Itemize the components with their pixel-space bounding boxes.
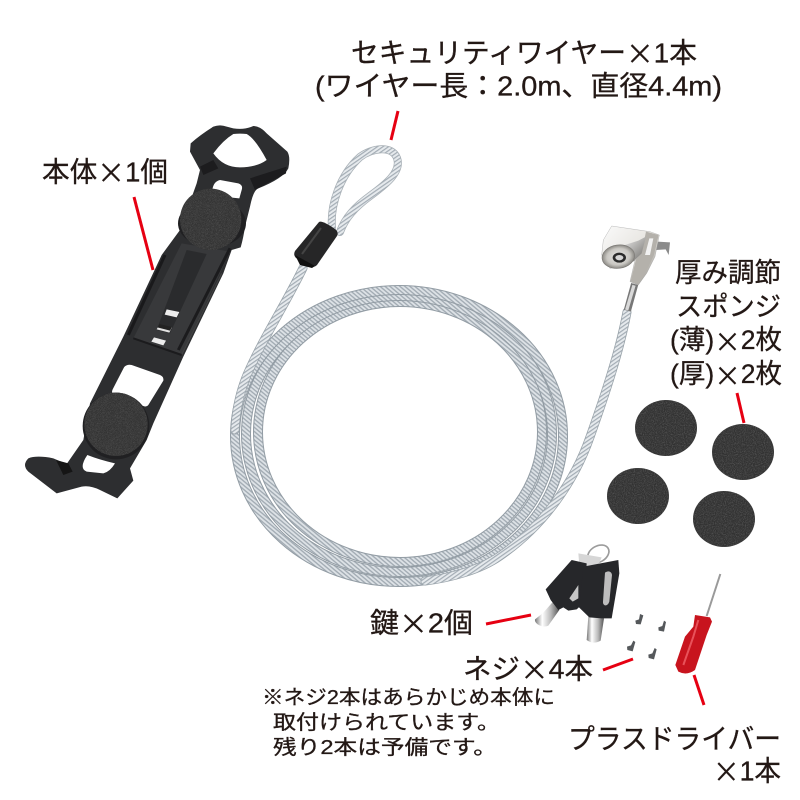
- foam pad upper: [178, 189, 246, 250]
- label: security wire: セキュリティワイヤー×1本: [351, 33, 697, 73]
- tail strand to lock: [425, 312, 627, 581]
- wire lock head: [601, 226, 670, 311]
- lead strand from ferrule: [235, 268, 303, 430]
- product bracket: main body: [25, 125, 289, 498]
- callout line: screws: [603, 659, 633, 670]
- label: body: 本体×1個: [42, 152, 168, 192]
- wire loop: [332, 149, 398, 232]
- sponge 2: [712, 424, 774, 480]
- foam pad lower: [83, 393, 149, 459]
- note: [262, 686, 555, 759]
- sponge 3: [607, 468, 669, 524]
- foam spacer sponges: [607, 400, 774, 547]
- wire ferrule sleeve: [294, 222, 338, 268]
- label: sponge text block: (薄)×2枚: [670, 320, 782, 360]
- label: sponge text block: [670, 258, 782, 394]
- middle strand: [246, 296, 552, 572]
- sponge 4: [693, 491, 755, 547]
- slide rail: [128, 243, 230, 355]
- label: screwdriver: プラスドライバー: [568, 724, 781, 754]
- label: wire dimensions: (ワイヤー長：2.0m、直径4.4m): [315, 70, 722, 102]
- left key: [535, 560, 587, 626]
- label: sponge text block: スポンジ: [676, 292, 781, 322]
- label: keys: 鍵×2個: [370, 603, 473, 643]
- callout line: sponge: [737, 393, 744, 423]
- label: sponge text block: 厚み調節: [675, 258, 781, 288]
- callout line: wire: [391, 111, 398, 140]
- note: ※ネジ2本はあらかじめ本体に: [262, 686, 555, 709]
- label: screwdriver: ×1本: [713, 751, 781, 791]
- callout line: body: [134, 197, 153, 270]
- note: 取付けられています。: [273, 711, 500, 734]
- label: screws: ネジ×4本: [463, 649, 593, 689]
- screwdriver: [675, 574, 720, 673]
- callout line: screwdriver: [694, 675, 704, 705]
- note: 残り2本は予備です。: [273, 736, 497, 759]
- label: sponge text block: (厚)×2枚: [670, 354, 782, 394]
- outer strand: [235, 290, 563, 582]
- sponge 1: [635, 400, 697, 456]
- screws: [627, 614, 666, 659]
- inner strand: [258, 302, 542, 562]
- keys: [535, 541, 619, 643]
- security wire coil: [235, 268, 627, 582]
- label: screwdriver: [568, 724, 781, 791]
- callout line: key: [486, 615, 531, 624]
- right key: [579, 560, 619, 643]
